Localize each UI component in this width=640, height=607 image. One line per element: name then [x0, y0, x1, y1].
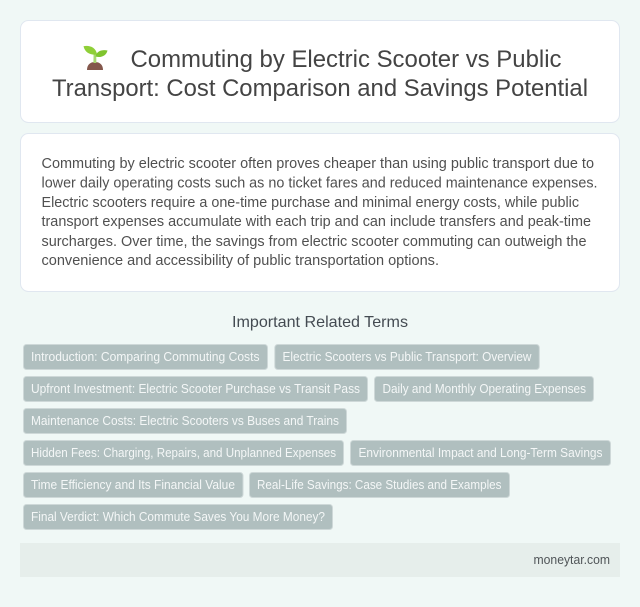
summary text: surcharges. Over time, the savings from electric scooter commuting can outweigh the: [42, 234, 586, 250]
tag: Introduction: Comparing Commuting Costs: [31, 349, 260, 364]
tag: [24, 504, 332, 530]
tag: [374, 376, 594, 402]
tag list: [24, 344, 610, 530]
title: Transport: Cost Comparison and Savings Potential: [52, 75, 588, 102]
summary text: Electric scooters require a one-time purchase and minimal energy costs, while public: [42, 195, 580, 211]
summary text: lower daily operating costs such as no ticket fares and reduced maintenance expenses.: [42, 176, 598, 192]
icon: sprout: [84, 46, 108, 70]
tag: Hidden Fees: Charging, Repairs, and Unplanned Expenses: [31, 445, 336, 460]
tag: Final Verdict: Which Commute Saves You More Money?: [31, 509, 325, 524]
title: [52, 46, 588, 102]
footer: [20, 543, 620, 577]
tag: Daily and Monthly Operating Expenses: [382, 381, 586, 396]
tag: [24, 408, 346, 434]
tag: [24, 472, 243, 498]
tag: [24, 440, 344, 466]
tag: [275, 344, 539, 370]
summary text: convenience and accessibility of public transportation options.: [42, 253, 439, 269]
summary text: transport expenses accumulate with each trip and can include transfers and peak-time: [42, 214, 591, 230]
title: Commuting by Electric Scooter vs Public: [130, 46, 562, 73]
panel: title card: [20, 20, 620, 122]
tag: [350, 440, 610, 466]
tag: Time Efficiency and Its Financial Value: [31, 477, 235, 492]
tag: Environmental Impact and Long-Term Savings: [358, 445, 602, 460]
tag: Real-Life Savings: Case Studies and Examples: [257, 477, 502, 492]
footer: moneytar.com: [534, 552, 610, 567]
panel: summary card: [20, 134, 620, 292]
tag: Maintenance Costs: Electric Scooters vs Buses and Trains: [31, 413, 339, 428]
tag: [250, 472, 510, 498]
tag: [24, 376, 368, 402]
tag: Upfront Investment: Electric Scooter Purchase vs Transit Pass: [31, 381, 360, 396]
summary text: [42, 156, 598, 269]
tag: [24, 344, 268, 370]
tag: Electric Scooters vs Public Transport: Overview: [282, 349, 532, 364]
summary text: Commuting by electric scooter often proves cheaper than using public transport due to: [42, 156, 594, 172]
heading: important related terms: Important Related Terms: [232, 314, 408, 331]
